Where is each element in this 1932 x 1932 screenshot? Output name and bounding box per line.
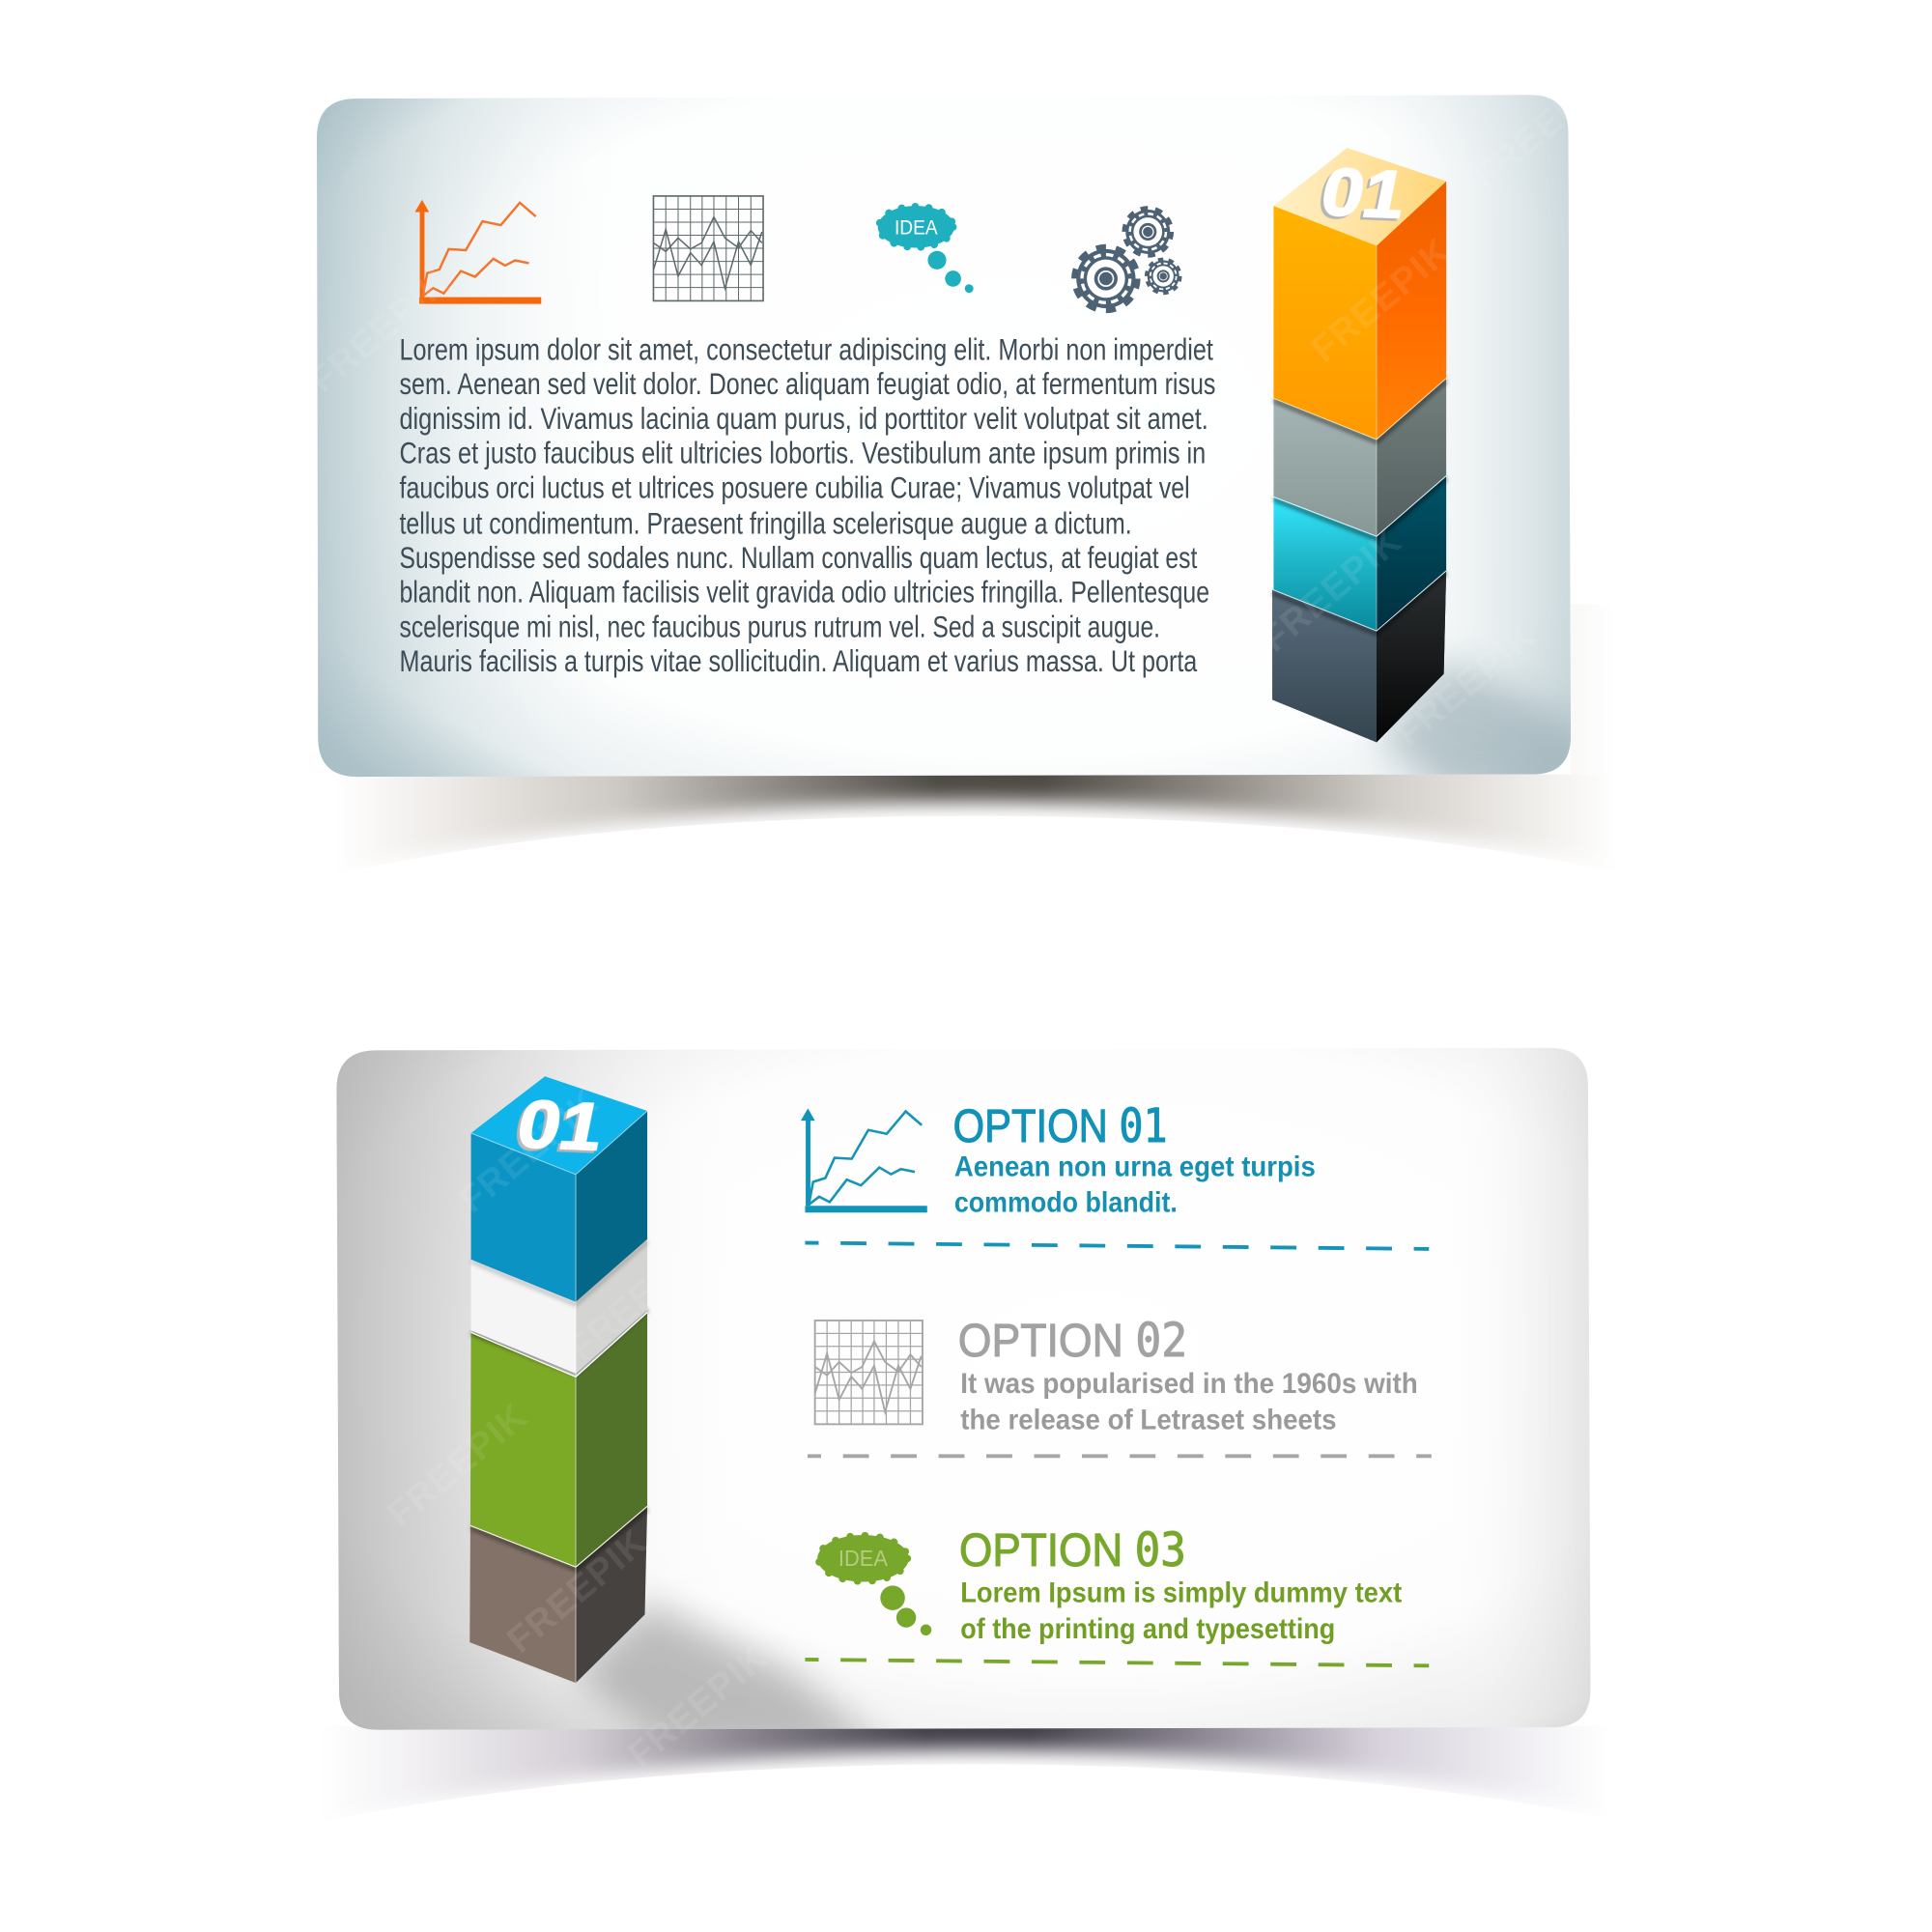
watermarks: bottom card: FREEPIK <box>561 1229 717 1369</box>
text: option 03 description <box>960 1577 1402 1645</box>
text block: lorem ipsum paragraph <box>400 332 1215 678</box>
text block: lorem ipsum paragraph: sem. Aenean sed velit dolor. Donec aliquam feugiat odio, at fermentum risus <box>400 367 1215 401</box>
text block: lorem ipsum paragraph: Lorem ipsum dolor sit amet, consectetur adipiscing elit. Morbi non imperdiet <box>400 332 1213 366</box>
panel shadow: top card <box>296 604 1652 937</box>
label: 01 on orange cube: 01 <box>1315 155 1412 232</box>
text block: lorem ipsum paragraph: Mauris facilisis a turpis vitae sollicitudin. Aliquam et varius massa. Ut porta <box>400 644 1198 678</box>
text: option 03 description: of the printing and typesetting <box>960 1613 1335 1645</box>
text: option 01 description: Aenean non urna eget turpis <box>954 1151 1316 1183</box>
cube cast shadow: bottom card <box>576 1603 888 1750</box>
text block: lorem ipsum paragraph: dignissim id. Vivamus lacinia quam purus, id porttitor velit volutpat sit amet. <box>400 402 1208 436</box>
icon: gears <box>1074 209 1180 310</box>
icon: green idea bubble <box>817 1535 931 1635</box>
watermarks: top card: FREEPIK <box>1303 230 1459 370</box>
icon: green idea bubble: IDEA <box>838 1546 889 1571</box>
watermarks: bottom card: FREEPIK <box>499 1520 655 1662</box>
watermarks: top card: FREEPIK <box>1465 57 1622 198</box>
text block: lorem ipsum paragraph: tellus ut condimentum. Praesent fringilla scelerisque augue a dictum. <box>400 506 1132 540</box>
text: option 02 description: the release of Letraset sheets <box>960 1404 1337 1435</box>
watermarks: top card: FREEPIK <box>1388 614 1545 755</box>
text: option 03 description: Lorem Ipsum is simply dummy text <box>960 1577 1402 1609</box>
icon: gray grid wave chart <box>815 1321 923 1424</box>
icon: teal idea bubble <box>878 206 974 293</box>
watermarks: top card: FREEPIK <box>302 261 458 401</box>
text block: lorem ipsum paragraph: scelerisque mi nisl, nec faucibus purus rutrum vel. Sed a suscipit augue. <box>400 610 1160 643</box>
watermarks: bottom card: FREEPIK <box>451 1081 608 1221</box>
panel: top card with text and icons <box>317 95 1571 777</box>
text: option 01 description <box>954 1151 1316 1219</box>
heading: option 01: OPTION 01 <box>953 1099 1168 1153</box>
label: 01 on blue cube: 01 <box>511 1087 610 1164</box>
option 01 row <box>801 1099 1429 1249</box>
text block: lorem ipsum paragraph: Suspendisse sed sodales nunc. Nullam convallis quam lectus, at feugiat est <box>400 541 1198 575</box>
panel: bottom card with options <box>336 1048 1590 1776</box>
heading: option 02: OPTION 02 <box>958 1314 1187 1368</box>
icon: gray grid wave chart <box>653 196 763 300</box>
watermarks: bottom card: FREEPIK <box>380 1395 535 1536</box>
chart: stacked isometric column, orange <box>1272 148 1446 742</box>
watermarks: bottom card: FREEPIK <box>620 1635 776 1776</box>
watermarks: top card <box>302 57 1622 755</box>
icon: orange line chart <box>414 200 541 304</box>
chart: stacked isometric column, blue <box>469 1076 647 1683</box>
panel shadow: bottom card <box>284 1726 1652 1887</box>
watermarks: bottom card <box>380 1081 776 1776</box>
cube cast shadow: top card <box>1378 660 1584 795</box>
text: option 02 description <box>960 1368 1418 1435</box>
text block: lorem ipsum paragraph: Cras et justo faucibus elit ultricies lobortis. Vestibulum ante ipsum primis in <box>400 437 1206 470</box>
watermarks: top card: FREEPIK <box>1254 520 1409 660</box>
icon: teal idea bubble: IDEA <box>895 215 938 240</box>
text block: lorem ipsum paragraph: faucibus orci luctus et ultrices posuere cubilia Curae; Vivamus volutpat vel <box>400 470 1190 504</box>
option 02 row <box>808 1314 1432 1456</box>
text: option 01 description: commodo blandit. <box>954 1187 1178 1219</box>
heading: option 03: OPTION 03 <box>959 1523 1186 1577</box>
icon: blue line chart <box>801 1108 927 1212</box>
option 03 row <box>805 1523 1429 1665</box>
text block: lorem ipsum paragraph: blandit non. Aliquam facilisis velit gravida odio ultricies fringilla. Pellentesque <box>400 576 1209 610</box>
text: option 02 description: It was popularised in the 1960s with <box>960 1368 1418 1400</box>
